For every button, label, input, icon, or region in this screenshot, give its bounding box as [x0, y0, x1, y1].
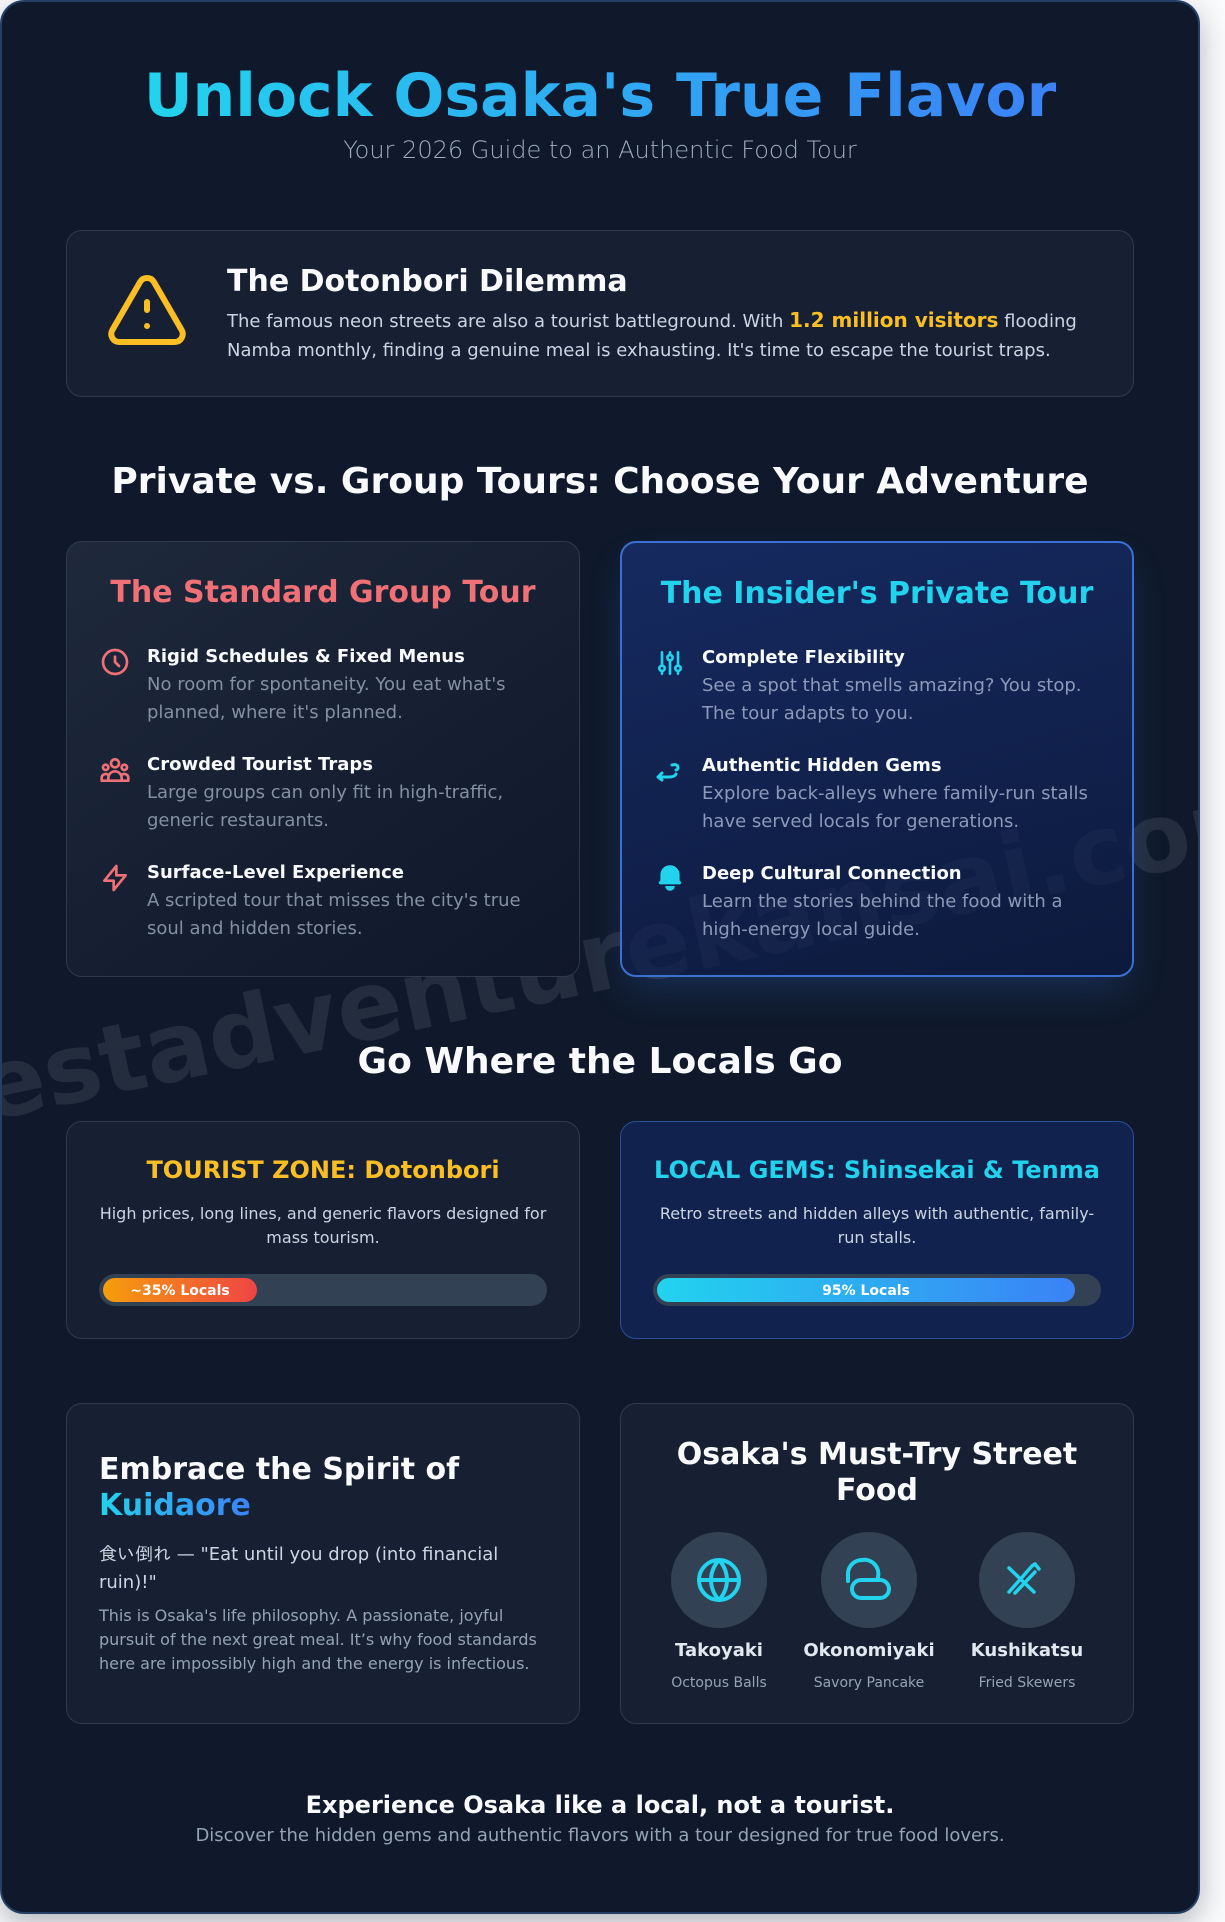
item: cultural connection: Learn the stories behind the food with a [702, 891, 1062, 912]
item: hidden gems: Explore back-alleys where family-run stalls [702, 783, 1088, 804]
bar: share of locals [653, 1274, 1101, 1306]
item: flexibility: See a spot that smells amazing? You stop. [702, 675, 1082, 696]
item text: Complete Flexibility [702, 647, 905, 668]
footer text: Discover the hidden gems and authentic flavors with a tour designed for true food lovers. [195, 1825, 1005, 1846]
bar: share of locals: 95% Locals [822, 1283, 910, 1299]
dilemma heading: The Dotonbori Dilemma [227, 264, 628, 299]
local gems text: Retro streets and hidden alleys with authentic, family- [660, 1204, 1094, 1223]
panel: kuidaore [66, 1403, 580, 1724]
kuidaore heading: Embrace the Spirit of [99, 1452, 459, 1487]
kuidaore quote: 食い倒れ — "Eat until you drop (into financial [99, 1544, 498, 1565]
icon: skewers [979, 1532, 1075, 1628]
bar: share of locals [99, 1274, 547, 1306]
group tour heading: The Standard Group Tour [110, 575, 536, 610]
item: hidden gems [656, 755, 1088, 832]
item: flexibility [658, 647, 1082, 724]
item: hidden gems: have served locals for generations. [702, 811, 1019, 832]
local gems text [660, 1204, 1094, 1247]
kuidaore quote: ruin)!" [99, 1572, 157, 1593]
heading: private vs group: Private vs. Group Tours: Choose Your Adventure [111, 461, 1089, 502]
dilemma text: The famous neon streets are also a tourist battleground. With 1.2 million visitors flooding [227, 308, 1077, 332]
food: kushikatsu [971, 1532, 1083, 1691]
subtitle: Your 2026 Guide to an Authentic Food Tour [343, 136, 857, 164]
icon: warning triangle [108, 275, 186, 345]
item: cultural connection: high-energy local guide. [702, 919, 920, 940]
kuidaore text [98, 1606, 537, 1673]
okonomiyaki description: Savory Pancake [814, 1675, 924, 1691]
kuidaore heading: Kuidaore [99, 1488, 251, 1523]
food: takoyaki [671, 1532, 767, 1691]
item: crowded traps: generic restaurants. [147, 810, 329, 831]
tourist zone text: High prices, long lines, and generic flavors designed for [100, 1204, 546, 1223]
item text: Rigid Schedules & Fixed Menus [147, 646, 465, 667]
item: crowded traps [100, 754, 503, 831]
kuidaore text: here are impossibly high and the energy is infectious. [99, 1654, 529, 1673]
icon: clock [102, 648, 128, 676]
item text: Deep Cultural Connection [702, 863, 962, 884]
bar: share of locals: ~35% Locals [130, 1283, 230, 1299]
panel: street food [620, 1403, 1134, 1724]
takoyaki name: Takoyaki [675, 1640, 763, 1661]
item: surface level [102, 862, 521, 939]
panel: local gems [620, 1121, 1134, 1339]
icon: globe [671, 1532, 767, 1628]
icon: pancake [821, 1532, 917, 1628]
footer headline: Experience Osaka like a local, not a tourist. [306, 1791, 894, 1819]
item: surface level: soul and hidden stories. [147, 918, 363, 939]
street food heading: Food [836, 1473, 918, 1508]
icon: lightning bolt [102, 864, 128, 892]
panel: standard group tour [66, 541, 580, 977]
icon: return arrow [656, 763, 680, 782]
item text: Crowded Tourist Traps [147, 754, 373, 775]
kuidaore heading [99, 1452, 460, 1523]
heading: go where the locals go: Go Where the Locals Go [358, 1041, 842, 1082]
tourist zone heading: TOURIST ZONE: Dotonbori [146, 1156, 500, 1184]
item: rigid schedules: No room for spontaneity. You eat what's [147, 674, 506, 695]
icon: bell [658, 865, 682, 891]
panel: tourist zone [66, 1121, 580, 1339]
private tour heading: The Insider's Private Tour [661, 576, 1093, 611]
takoyaki description: Octopus Balls [671, 1675, 767, 1691]
kushikatsu description: Fried Skewers [979, 1675, 1075, 1691]
tourist zone text: mass tourism. [266, 1228, 380, 1247]
item text: Authentic Hidden Gems [702, 755, 942, 776]
item: cultural connection [658, 863, 1062, 940]
kushikatsu name: Kushikatsu [971, 1640, 1083, 1661]
panel: the Dotonbori dilemma [66, 230, 1134, 397]
item text: Surface-Level Experience [147, 862, 404, 883]
dilemma text: Namba monthly, finding a genuine meal is exhausting. It's time to escape the tourist traps. [227, 340, 1051, 361]
kuidaore quote [99, 1544, 498, 1593]
footer [195, 1791, 1005, 1846]
food: okonomiyaki [803, 1532, 935, 1691]
street food heading: Osaka's Must-Try Street [677, 1437, 1077, 1472]
item: rigid schedules [102, 646, 506, 723]
icon: people [100, 758, 130, 782]
item: crowded traps: Large groups can only fit in high-traffic, [147, 782, 503, 803]
dilemma text [226, 308, 1077, 361]
item: flexibility: The tour adapts to you. [702, 703, 913, 724]
title: Unlock Osaka's True Flavor [144, 61, 1056, 131]
kuidaore text: pursuit of the next great meal. It’s why food standards [99, 1630, 537, 1649]
item: surface level: A scripted tour that misses the city's true [147, 890, 521, 911]
okonomiyaki name: Okonomiyaki [803, 1640, 935, 1661]
local gems text: run stalls. [838, 1228, 916, 1247]
icon: sliders [658, 651, 682, 675]
panel: insider's private tour [620, 541, 1134, 977]
tourist zone text [100, 1204, 546, 1247]
street food heading [677, 1437, 1077, 1508]
kuidaore text: This is Osaka's life philosophy. A passionate, joyful [99, 1606, 503, 1625]
item: rigid schedules: planned, where it's planned. [147, 702, 403, 723]
local gems heading: LOCAL GEMS: Shinsekai & Tenma [654, 1156, 1100, 1184]
